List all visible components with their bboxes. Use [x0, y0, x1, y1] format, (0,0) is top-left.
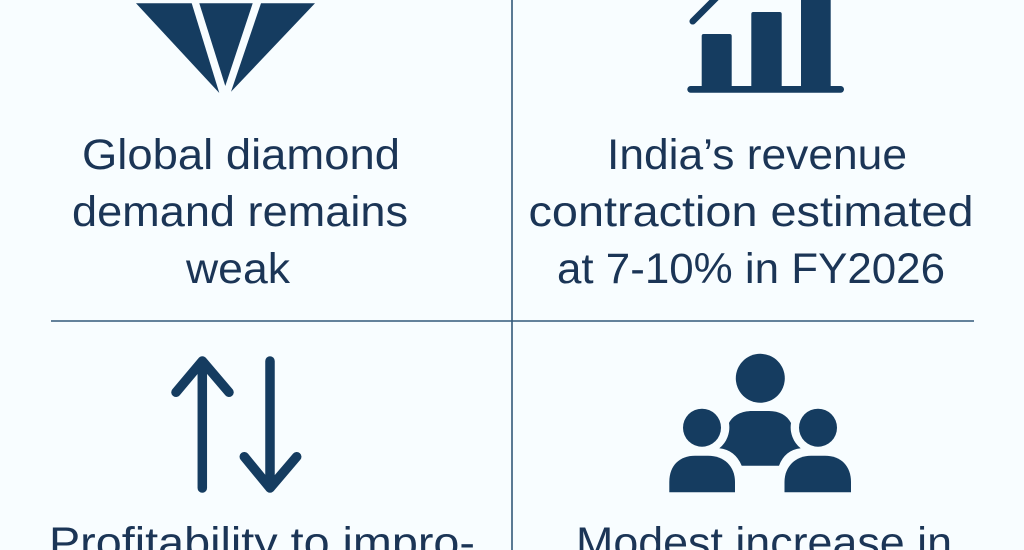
- text: global diamond demand: demand remains: [72, 188, 408, 236]
- text: India revenue contraction: at 7-10% in FY2026: [557, 245, 945, 293]
- text: global diamond demand: Global diamond: [82, 131, 400, 179]
- text: India revenue contraction: [528, 131, 974, 293]
- icon: rising bar chart: [687, 0, 844, 93]
- icon: group of people: [669, 354, 851, 492]
- text: India revenue contraction: India’s revenue: [607, 131, 907, 179]
- icon: up and down arrows: [176, 361, 297, 488]
- icon: diamond: [136, 3, 315, 93]
- text: India revenue contraction: contraction estimated: [528, 188, 974, 236]
- text: global diamond demand: [72, 131, 408, 293]
- text: global diamond demand: weak: [185, 245, 291, 293]
